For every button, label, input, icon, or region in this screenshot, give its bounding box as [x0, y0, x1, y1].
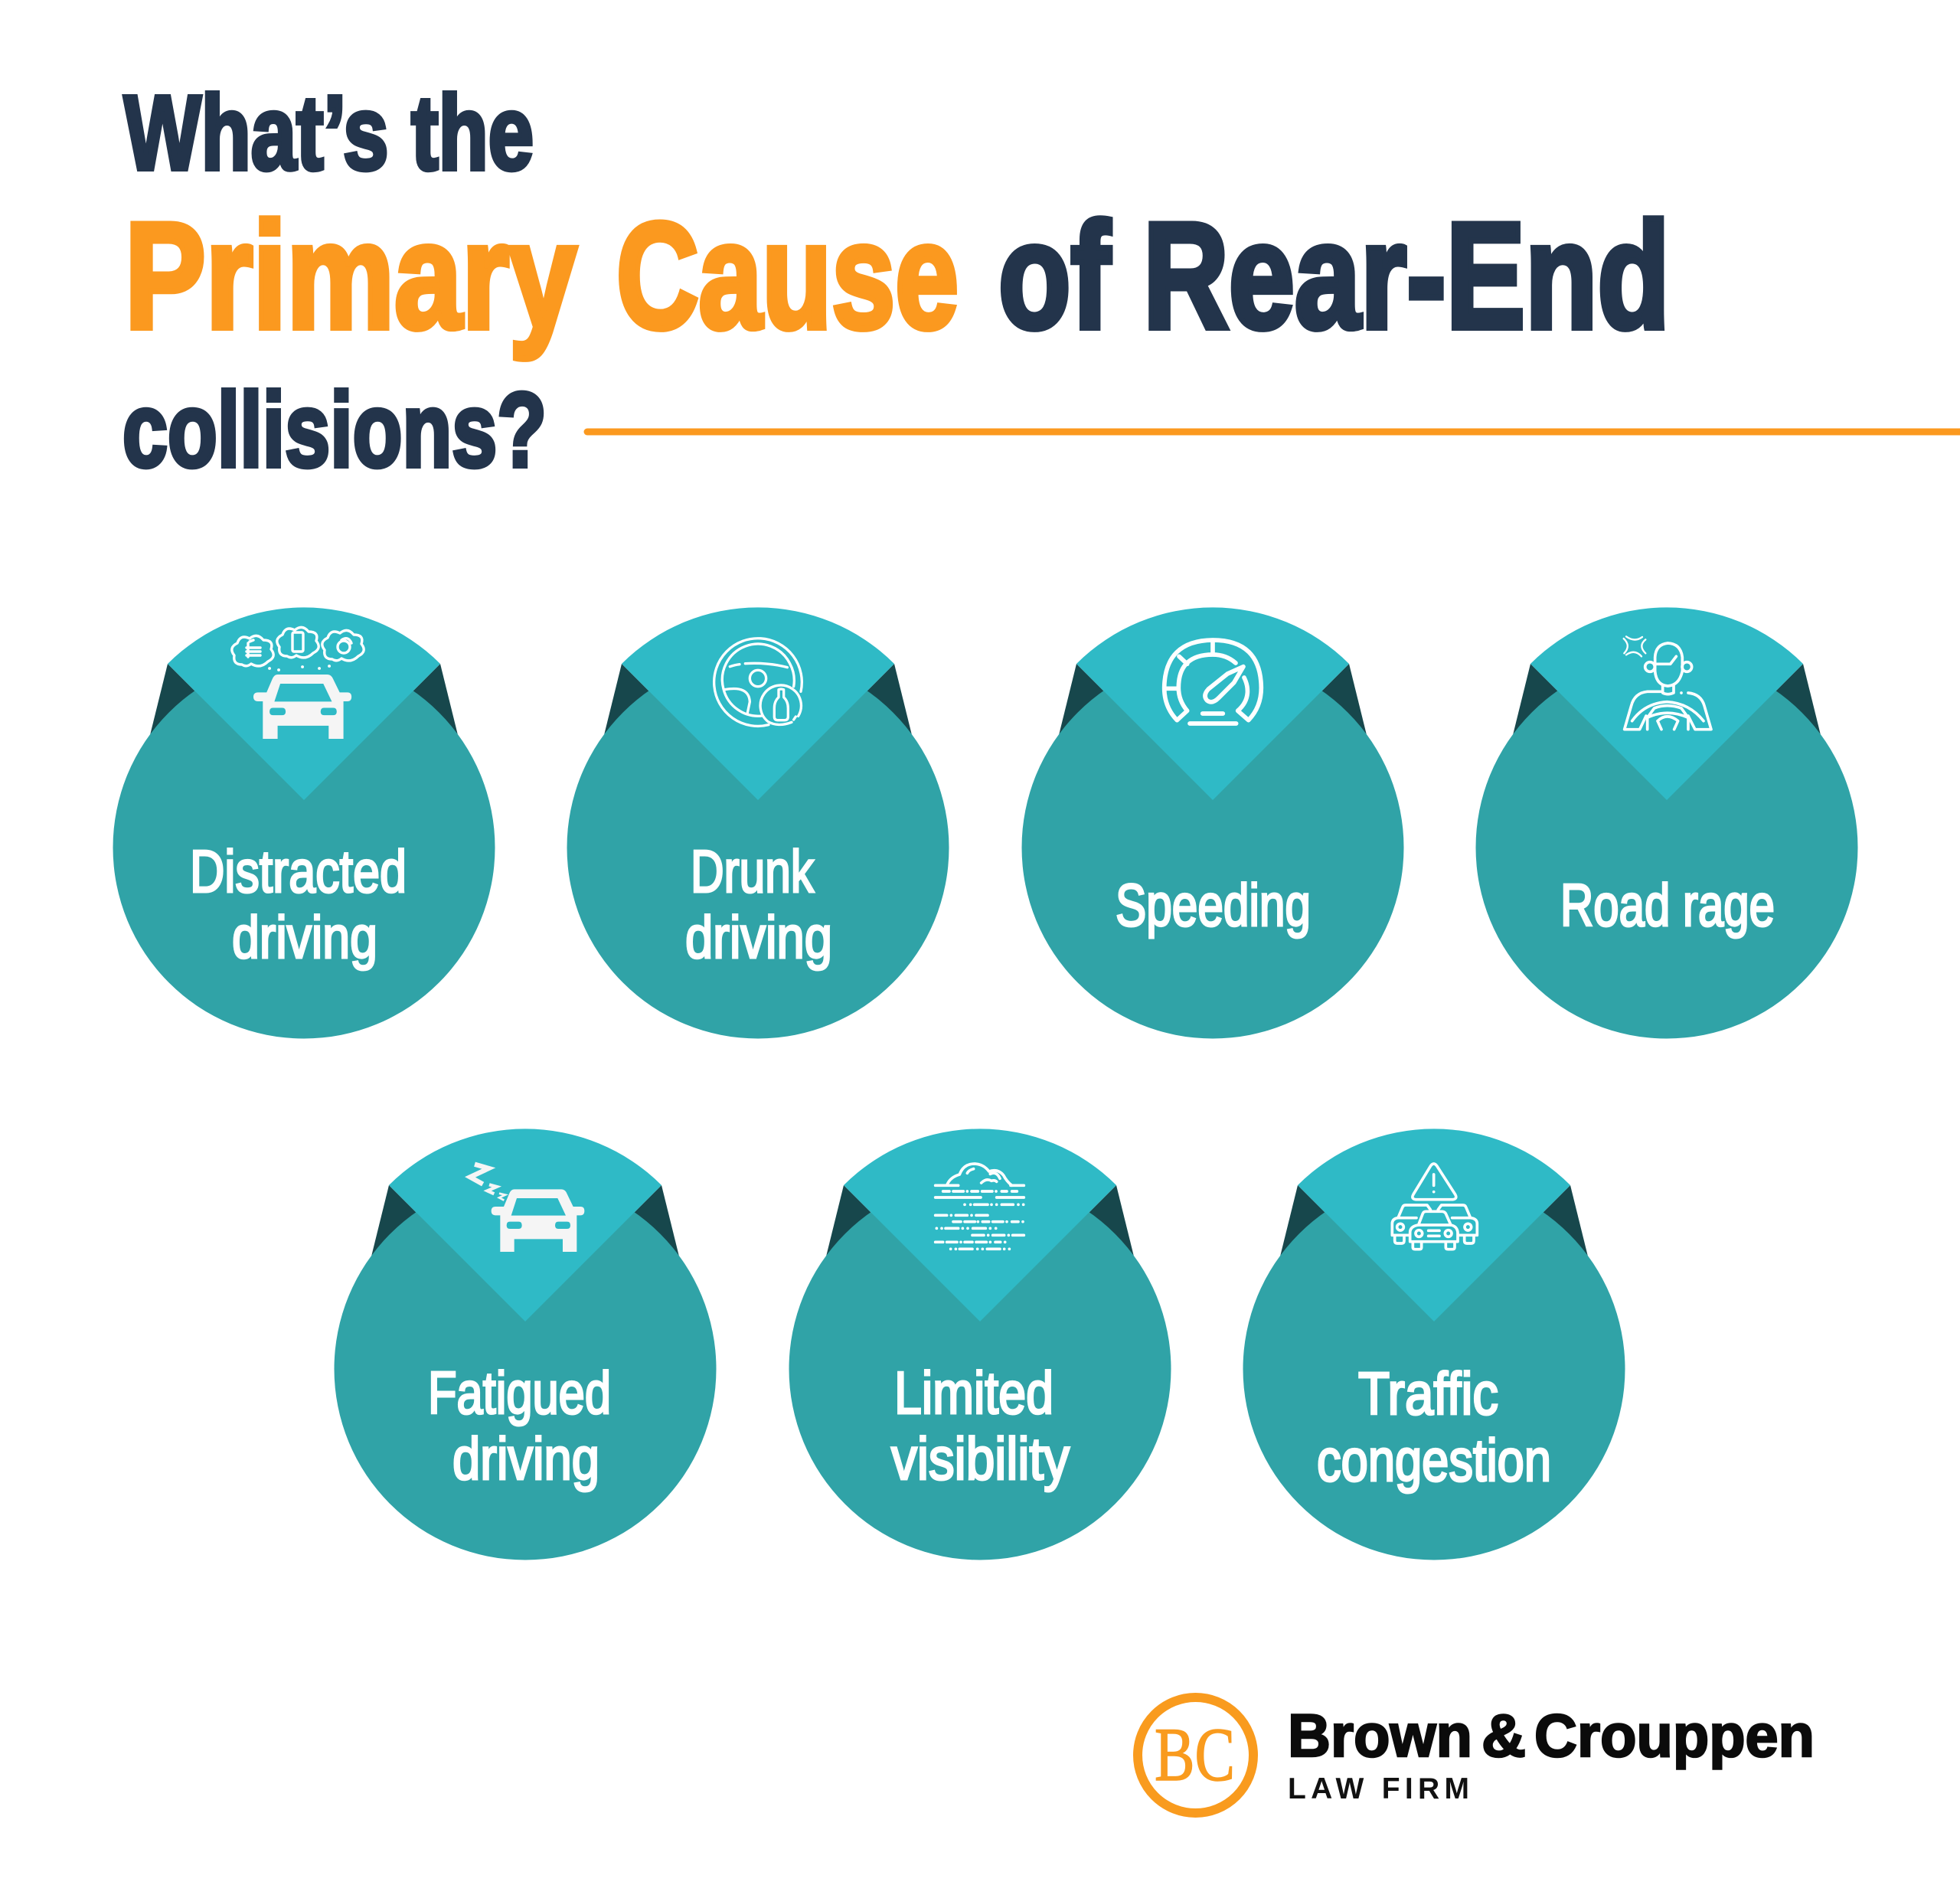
icon: angry driver [1624, 636, 1711, 730]
icon: warning sign and cars [1392, 1164, 1477, 1250]
logo mark: BC circle [1138, 1697, 1253, 1813]
logo subtitle: LAW FIRM [1288, 1772, 1469, 1805]
label: drunk driving: driving [685, 903, 832, 971]
icon: cloud and fog [936, 1164, 1024, 1249]
label: fatigued driving [428, 1359, 611, 1492]
label: limited visibility: visibility [891, 1425, 1070, 1492]
label: fatigued driving: Fatigued [428, 1359, 611, 1426]
logo wordmark: Brown [1288, 1701, 1472, 1769]
title highlight: Cause: Cause [616, 191, 959, 360]
title line 1: What’s the [124, 74, 534, 192]
label: distracted driving: Distracted [190, 838, 407, 905]
label: drunk driving [685, 838, 832, 971]
logo: Brown & Crouppen Law Firm [1138, 1697, 1815, 1813]
icon: steering wheel and bottle [714, 639, 802, 726]
logo wordmark: & [1481, 1701, 1526, 1769]
panel: traffic congestion [1243, 1129, 1625, 1560]
label: road rage: Road rage [1560, 871, 1775, 939]
logo wordmark: Crouppen [1534, 1701, 1815, 1769]
panel: speeding [1021, 607, 1404, 1038]
label: fatigued driving: driving [452, 1425, 599, 1492]
label: distracted driving: driving [232, 903, 377, 971]
panel: drunk driving [567, 607, 949, 1038]
icon: speedometer [1165, 640, 1261, 724]
panel: fatigued driving [334, 1129, 717, 1560]
label: speeding: Speeding [1116, 871, 1311, 939]
label: traffic congestion: Traffic [1358, 1360, 1498, 1427]
title highlight: Primary: Primary [125, 191, 577, 360]
logo wordmark [1288, 1701, 1815, 1769]
label: traffic congestion: congestion [1317, 1426, 1551, 1494]
icon: sleepy car [470, 1165, 584, 1252]
title line 3: collisions? [122, 371, 547, 489]
label: drunk driving: Drunk [691, 838, 815, 905]
title rule [587, 429, 1960, 435]
logo mark: BC circle: BC [1155, 1712, 1235, 1797]
title line 2 remainder: of Rear-End [998, 191, 1670, 360]
label: distracted driving [190, 838, 407, 971]
title [122, 74, 1670, 489]
label: limited visibility: Limited [894, 1359, 1054, 1426]
label: limited visibility [891, 1359, 1070, 1492]
panel: distracted driving [113, 607, 495, 1038]
label: traffic congestion [1317, 1360, 1551, 1494]
panel: road rage [1476, 607, 1857, 1038]
panel: limited visibility [789, 1129, 1171, 1560]
icon: car with distraction clouds [232, 627, 364, 739]
